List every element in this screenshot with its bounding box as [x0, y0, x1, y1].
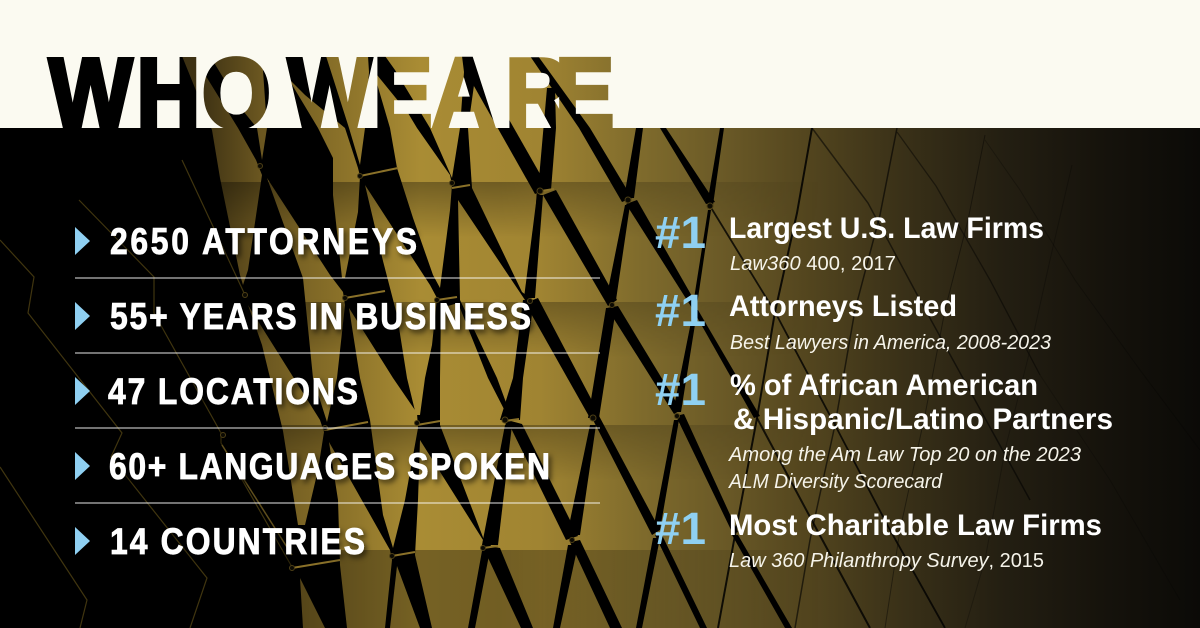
ranking: largest U.S. law firms [655, 207, 1044, 275]
stat: 55+ years in business: 55+ YEARS IN BUSINESS [110, 297, 531, 338]
ranking: African American and Hispanic/Latino partners: ALM Diversity Scorecard [728, 471, 943, 493]
ranking: African American and Hispanic/Latino partners: #1 [655, 364, 706, 415]
ranking: attorneys listed [655, 285, 1051, 354]
ranking: largest U.S. law firms: #1 [655, 207, 706, 258]
ranking: attorneys listed: Attorneys Listed [729, 290, 957, 323]
ranking: most charitable law firms: #1 [655, 503, 706, 554]
title: WHO WE ARE, knocked out to show the photo: WHO WE ARE [0, 39, 614, 148]
ranking: African American and Hispanic/Latino partners: % of African American [730, 369, 1038, 402]
ranking: most charitable law firms: Most Charitable Law Firms [729, 509, 1102, 542]
ranking: attorneys listed: #1 [655, 285, 706, 336]
stat: 60+ languages spoken: 60+ LANGUAGES SPOKEN [109, 447, 550, 488]
panel: number one rankings [655, 207, 1113, 572]
ranking: African American and Hispanic/Latino partners: Among the Am Law Top 20 on the 2023 [728, 444, 1081, 466]
stat: 2650 attorneys: 2650 ATTORNEYS [110, 222, 417, 263]
cream header band [0, 0, 1200, 128]
ranking: most charitable law firms [655, 503, 1102, 572]
panel: key firm statistics list [75, 222, 600, 563]
ranking: African American and Hispanic/Latino partners: & Hispanic/Latino Partners [733, 403, 1113, 436]
ranking: most charitable law firms: Law 360 Philanthropy Survey, 2015 [729, 550, 1044, 572]
ranking: largest U.S. law firms: Law360 400, 2017 [730, 253, 896, 275]
stat: 14 countries: 14 COUNTRIES [110, 522, 365, 563]
ranking: largest U.S. law firms: Largest U.S. Law Firms [729, 212, 1044, 245]
ranking: attorneys listed: Best Lawyers in America, 2008-2023 [730, 332, 1051, 354]
ranking: African American and Hispanic/Latino partners [655, 364, 1113, 493]
stat: 47 locations: 47 LOCATIONS [108, 372, 358, 413]
